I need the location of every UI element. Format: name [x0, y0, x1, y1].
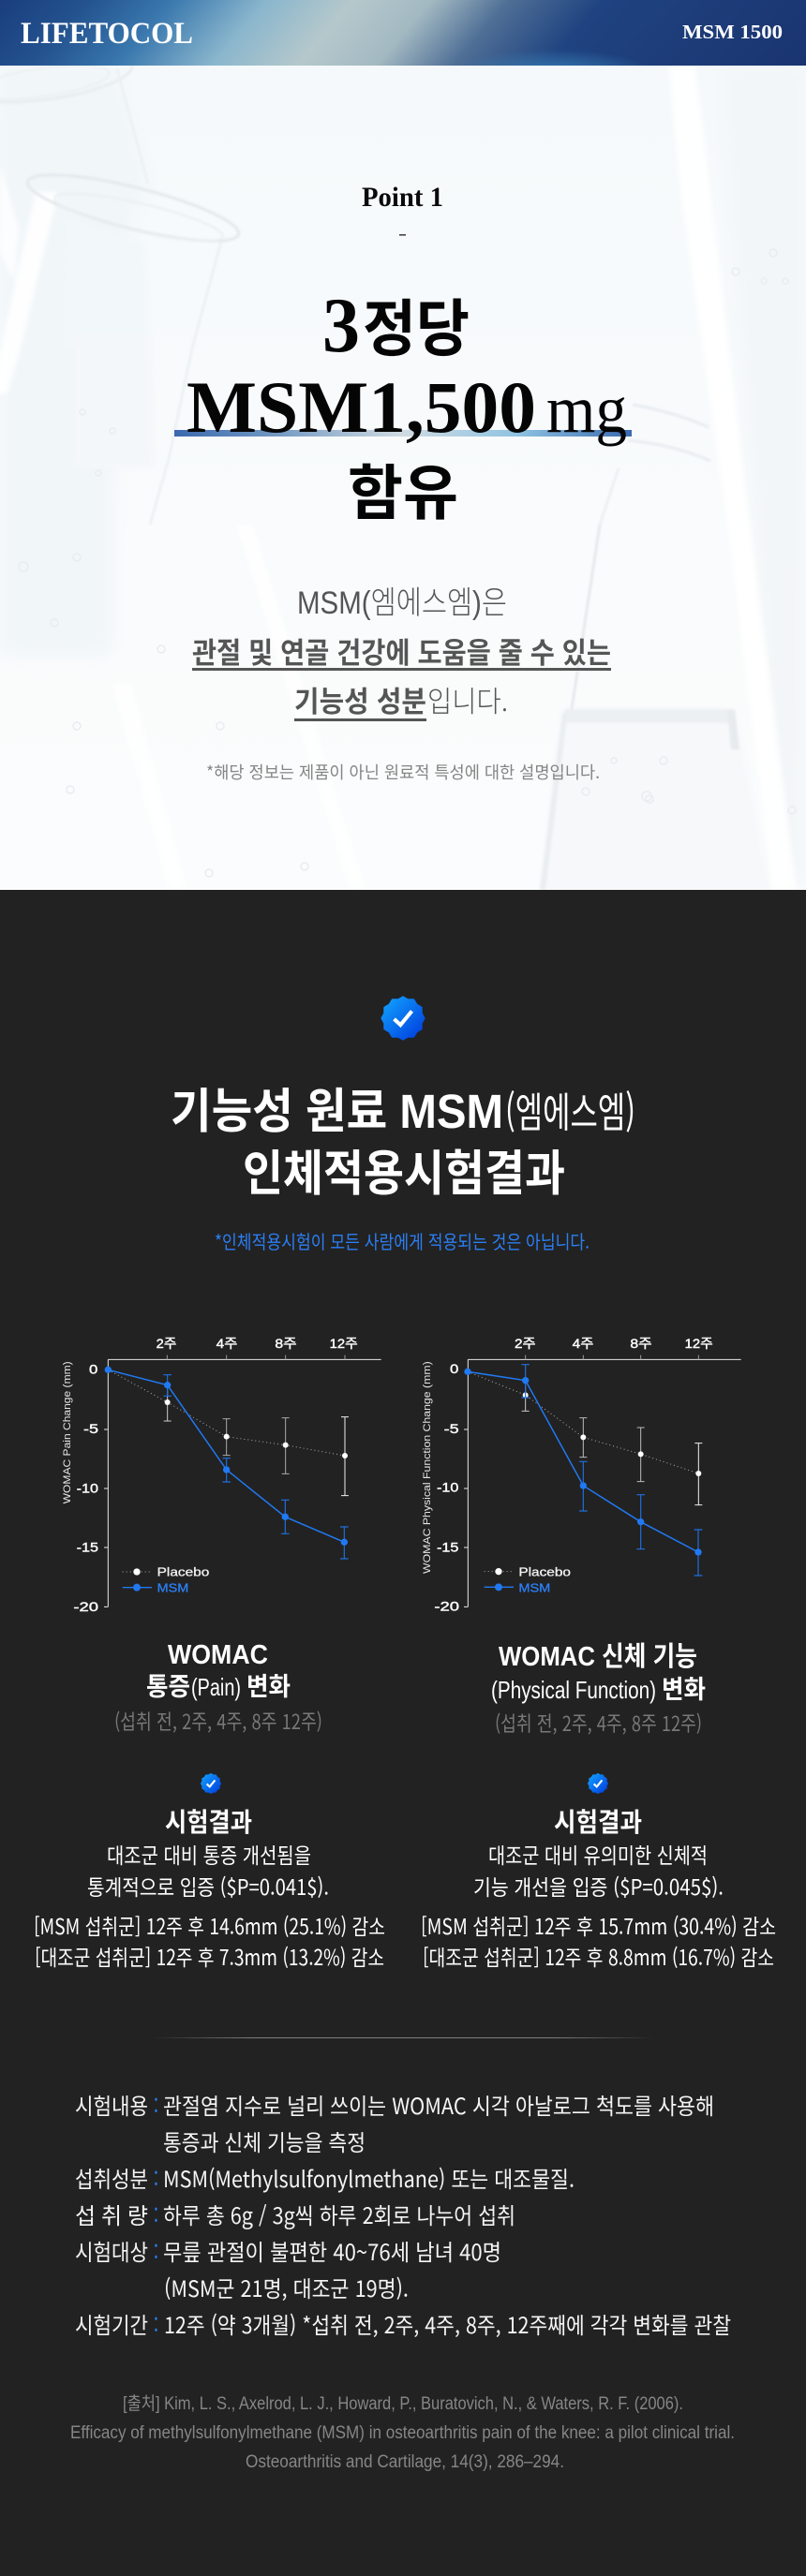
heading line 1: 3: [322, 282, 360, 369]
y axis values: -15: [437, 1539, 459, 1554]
row: subjects: [75, 2234, 501, 2303]
row: subjects: (MSM군 21명, 대조군 19명).: [164, 2271, 409, 2303]
result text: 대조군 대비 유의미한 신체적: [488, 1838, 708, 1870]
hero description: [192, 585, 611, 784]
panel: physical function result text: [421, 1641, 776, 1972]
chart heading: WOMAC: [168, 1640, 268, 1670]
source citation: Efficacy of methylsulfonylmethane (MSM) in osteoarthritis pain of the knee: a pilot clinical trial.: [70, 2423, 735, 2443]
legend: [485, 1565, 571, 1595]
row: test content: [75, 2088, 714, 2157]
y axis values: 0: [450, 1361, 459, 1376]
row: subjects: 무릎 관절이 불편한 40~76세 남녀 40명: [163, 2234, 501, 2267]
legend: MSM: [157, 1581, 188, 1595]
row: subjects: 시험대상: [75, 2234, 148, 2267]
section title: [171, 1079, 635, 1254]
result text: 대조군 대비 통증 개선됨을: [107, 1838, 311, 1870]
chart heading: WOMAC 신체 기능: [499, 1641, 697, 1672]
hero description: 입니다.: [427, 678, 508, 720]
result text: 기능 개선을 입증 ($P=0.045$).: [473, 1870, 724, 1902]
description line 1: MSM(엠에스엠)은: [297, 585, 507, 621]
row: test content: 시험내용: [75, 2088, 148, 2121]
title line 2: 인체적용시험결과: [243, 1134, 565, 1205]
product name: MSM 1500: [682, 21, 783, 43]
disclaimer: *해당 정보는 제품이 아닌 원료적 특성에 대한 설명입니다.: [206, 760, 600, 784]
panel: pain result text: [34, 1640, 385, 1972]
panel: trial details: [75, 2088, 731, 2340]
panel: hero background with glassware: [0, 42, 806, 890]
MSM series: [105, 1367, 349, 1559]
y axis values: -20: [73, 1599, 98, 1614]
week labels: 4주: [573, 1336, 593, 1351]
week labels: 2주: [157, 1336, 176, 1351]
result text: [473, 1838, 724, 1902]
row: test content: 관절염 지수로 널리 쓰이는 WOMAC 시각 아날로그 척도를 사용해: [163, 2088, 714, 2121]
y axis values: -20: [434, 1598, 459, 1613]
week labels: 8주: [275, 1336, 297, 1351]
y axis values: 0: [89, 1362, 98, 1377]
row: subjects: :: [154, 2234, 158, 2267]
week labels: 8주: [630, 1336, 652, 1351]
chart heading: 변화: [246, 1666, 291, 1703]
blue note: *인체적용시험이 모든 사람에게 적용되는 것은 아닙니다.: [215, 1227, 590, 1254]
row: test content: :: [154, 2088, 158, 2121]
chart heading: (Physical Function): [491, 1676, 656, 1704]
result text: [87, 1838, 329, 1902]
placebo series: [108, 1369, 349, 1496]
group outcomes: [421, 1909, 776, 1972]
point label: Point 1: [362, 182, 443, 213]
result heading: 시험결과: [554, 1802, 642, 1840]
icon: verified badge: [382, 997, 424, 1040]
line chart: WOMAC physical function change: [422, 1336, 741, 1613]
y axis values: -5: [83, 1421, 98, 1436]
hero heading block: [174, 182, 632, 532]
icon: check badge: [201, 1774, 221, 1793]
description line 2: 관절 및 연골 건강에 도움을 줄 수 있는: [192, 629, 611, 672]
source citation: Osteoarthritis and Cartilage, 14(3), 286–294.: [246, 2452, 564, 2472]
section title: (엠에스엠): [505, 1079, 635, 1139]
heading line 3: 함유: [348, 446, 458, 532]
row: ingredient: :: [154, 2161, 158, 2194]
line chart: WOMAC pain change: [62, 1336, 381, 1614]
heading line 1: [322, 279, 470, 369]
chart heading: 변화: [662, 1669, 706, 1706]
group outcomes: [대조군 섭취군] 12주 후 7.3mm (13.2%) 감소: [35, 1940, 384, 1972]
heading line 2: MSM1,500: [187, 366, 536, 448]
chart heading: [146, 1640, 291, 1703]
row: dose: 하루 총 6g / 3g씩 하루 2회로 나누어 섭취: [163, 2198, 515, 2230]
legend: Placebo: [518, 1565, 571, 1579]
MSM series: [464, 1365, 702, 1576]
measurement points: (섭취 전, 2주, 4주, 8주 12주): [495, 1708, 702, 1738]
row: dose: 섭 취 량: [75, 2198, 148, 2230]
chart heading: 통증: [146, 1666, 190, 1703]
row: period: :: [154, 2307, 158, 2340]
group outcomes: [MSM 섭취군] 12주 후 14.6mm (25.1%) 감소: [34, 1909, 385, 1941]
week labels: 4주: [216, 1336, 237, 1351]
chart heading: [491, 1641, 706, 1706]
row: ingredient: 섭취성분: [75, 2161, 148, 2194]
chart heading: (Pain): [191, 1673, 241, 1701]
row: period: 시험기간: [75, 2307, 148, 2340]
icon: check badge: [589, 1774, 607, 1793]
row: test content: 통증과 신체 기능을 측정: [163, 2124, 366, 2157]
source citation: [출처] Kim, L. S., Axelrod, L. J., Howard, P., Buratovich, N., & Waters, R. F. (2006).: [123, 2393, 683, 2414]
row: period: 12주 (약 3개월) *섭취 전, 2주, 4주, 8주, 12주째에 각각 변화를 관찰: [164, 2307, 731, 2340]
week labels: [157, 1336, 358, 1351]
y axis values: [434, 1361, 459, 1613]
y axis values: [73, 1362, 98, 1614]
brand logo: LIFETOCOL: [21, 17, 193, 51]
y axis values: -10: [437, 1480, 459, 1495]
legend: [123, 1565, 209, 1595]
y axis values: -10: [77, 1480, 98, 1495]
small dash: -: [398, 224, 407, 243]
result heading: 시험결과: [165, 1802, 252, 1840]
week labels: [515, 1336, 713, 1351]
panel: dark background: [0, 890, 806, 2576]
group outcomes: [34, 1909, 385, 1972]
result text: 통계적으로 입증 ($P=0.041$).: [87, 1870, 329, 1902]
axes: [104, 1355, 381, 1606]
placebo series: [468, 1371, 702, 1505]
heading line 2: mg: [546, 372, 627, 447]
y axis values: -15: [77, 1539, 98, 1554]
y axis title: WOMAC Physical Function Change (mm): [422, 1361, 433, 1574]
measurement points: (섭취 전, 2주, 4주, 8주 12주): [114, 1706, 322, 1736]
heading line 1: 정당: [363, 279, 470, 369]
row: ingredient: MSM(Methylsulfonylmethane) 또는 대조물질.: [163, 2161, 575, 2194]
title line 1: 기능성 원료 MSM: [171, 1085, 503, 1138]
week labels: 2주: [515, 1336, 536, 1351]
legend: Placebo: [157, 1565, 209, 1579]
axes: [464, 1355, 741, 1606]
highlight underline: [174, 430, 632, 437]
row: dose: :: [154, 2198, 158, 2230]
source citation: [70, 2393, 735, 2472]
y axis values: -5: [444, 1421, 459, 1436]
legend: MSM: [518, 1581, 550, 1595]
y axis title: WOMAC Pain Change (mm): [62, 1361, 73, 1503]
week labels: 12주: [330, 1336, 358, 1351]
description line 3: 기능성 성분: [294, 678, 426, 720]
week labels: 12주: [685, 1336, 713, 1351]
header bar: [0, 0, 806, 66]
